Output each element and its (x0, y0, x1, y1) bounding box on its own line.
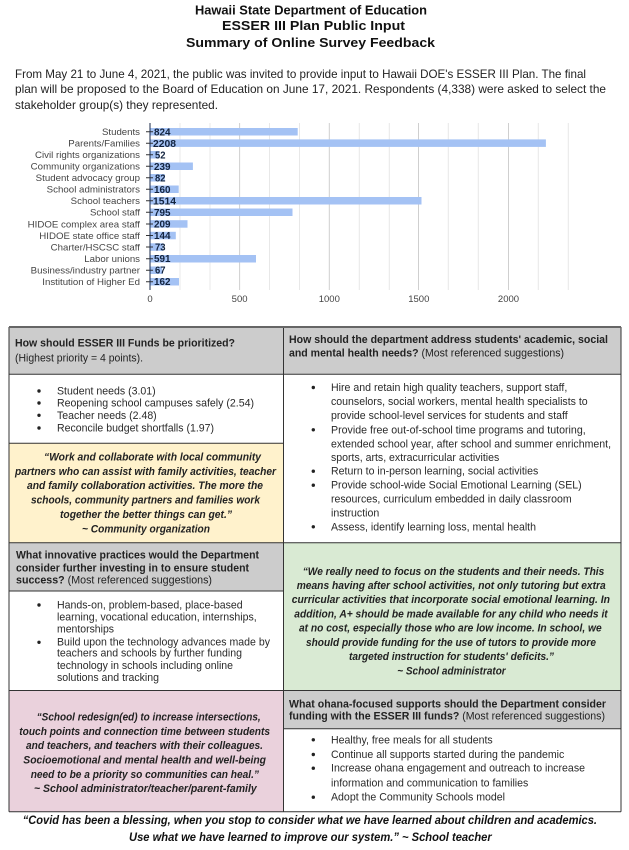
panel: community organization quote: partners who can assist with family activities, teacher (14, 466, 277, 478)
panel: community organization quote: schools, community partners and families work (31, 495, 261, 507)
x axis labels: 1000 (319, 294, 340, 305)
list: priority scores: Reopening school campuses safely (2.54) (57, 398, 254, 410)
panel: ohana supports header: What ohana-focused supports should the Department consider (289, 699, 607, 711)
category labels: Charter/HSCSC staff (51, 242, 140, 254)
panel: community organization quote: and family collaboration activities. The more the (27, 480, 263, 492)
category labels: School teachers (71, 196, 140, 207)
value labels: 52 (155, 150, 166, 161)
list: academic and mental health suggestions: resources, curriculum embedded in daily classroom (331, 494, 572, 506)
panel: school administrator quote: addition, A+ should be made available for any child who needs it (294, 608, 609, 620)
category labels: Civil rights organizations (35, 150, 140, 161)
category labels (28, 127, 140, 288)
bar chart: stakeholder groups (28, 123, 568, 305)
list: academic and mental health suggestions: Provide free out-of-school time programs and tutoring, (331, 424, 586, 436)
panel: community organization quote: “Work and collaborate with local community (44, 452, 262, 464)
panel: community organization quote (9, 443, 284, 543)
value labels: 239 (154, 162, 171, 173)
panel: prioritization header: (Highest priority = 4 points). (15, 353, 143, 365)
panel: school administrator/teacher/parent quote: and teachers, and teachers with their colleagues. (26, 740, 263, 752)
panel: academic needs header (284, 327, 621, 374)
list: ohana supports: Increase ohana engagement and outreach to increase (331, 763, 585, 775)
x axis labels: 500 (232, 294, 248, 305)
list: academic and mental health suggestions: Provide school-wide Social Emotional Learning (SEL) (331, 480, 582, 492)
list: innovative practices: Build upon the technology advances made by (57, 637, 270, 649)
closing quote: “Covid has been a blessing, when you stop to consider what we have learned about children and academics. (23, 815, 597, 827)
category labels: Parents/Families (68, 138, 140, 150)
category labels: Students (102, 127, 140, 138)
category labels: Business/industry partner (31, 266, 140, 276)
panel: school administrator/teacher/parent quote: touch points and connection time between students (19, 726, 270, 738)
value labels: 144 (154, 231, 171, 242)
x axis labels: 1500 (408, 294, 429, 305)
category labels: Labor unions (84, 254, 140, 265)
panel: school administrator quote: targeted instruction for students' deficits.” (349, 651, 554, 663)
panel: innovative practices header (9, 543, 284, 591)
list: innovative practices: learning, vocational education, internships, (57, 611, 257, 623)
title: Summary of Online Survey Feedback (186, 36, 435, 50)
list: ohana supports: Continue all supports started during the pandemic (331, 749, 565, 761)
title: Hawaii State Department of Education (195, 4, 427, 18)
bars (150, 128, 546, 286)
panel: school administrator quote: means having after school activities, not only tutoring but extra (297, 580, 606, 592)
list: innovative practices (37, 599, 270, 684)
list: academic and mental health suggestions: counselors, social workers, mental health specialists to (331, 396, 588, 408)
panel: school administrator quote: “We really need to focus on the students and their needs. This (303, 566, 604, 578)
x axis labels: 2000 (498, 294, 519, 305)
intro paragraph: From May 21 to June 4, 2021, the public was invited to provide input to Hawaii DOE's ESSER III Plan. The final (15, 67, 586, 81)
list: academic and mental health suggestions: Assess, identify learning loss, mental health (331, 521, 536, 533)
value labels: 160 (154, 185, 171, 196)
value labels: 82 (155, 173, 166, 184)
panel: innovative practices header: success? (Most referenced suggestions) (16, 575, 212, 587)
panel: academic needs header: How should the department address students' academic, social (289, 334, 608, 346)
list: priority scores: Student needs (3.01) (57, 386, 156, 398)
value labels: 1514 (153, 196, 176, 207)
list: innovative practices: mentorships (57, 624, 114, 636)
list: innovative practices: teachers and schools by further funding (57, 648, 242, 660)
panel: academic needs header: and mental health needs? (Most referenced suggestions) (289, 348, 564, 360)
panel: school administrator quote: curricular activities that incorporate social emotional learning. In (292, 594, 610, 606)
value labels: 162 (154, 277, 171, 288)
value labels: 2208 (153, 139, 176, 150)
panel: school administrator/teacher/parent quote: ~ School administrator/teacher/parent-family (34, 783, 258, 795)
category labels: Student advocacy group (36, 173, 140, 184)
category labels: Community organizations (31, 162, 140, 172)
panel: prioritization header (9, 327, 284, 374)
value labels: 591 (154, 254, 171, 265)
value labels (153, 127, 176, 288)
value labels: 824 (154, 127, 171, 138)
panel: innovative practices header: consider further investing in to ensure student (16, 563, 249, 575)
list: ohana supports (312, 734, 585, 804)
panel: ohana supports header (284, 690, 621, 729)
value labels: 67 (155, 266, 166, 277)
panel: prioritization header: How should ESSER III Funds be prioritized? (15, 338, 235, 350)
list: ohana supports: Healthy, free meals for all students (331, 734, 493, 746)
list: priority scores: Reconcile budget shortfalls (1.97) (57, 423, 214, 435)
closing quote (23, 815, 597, 844)
x axis labels: 0 (147, 294, 153, 305)
list: innovative practices: technology in schools including online (57, 660, 233, 672)
category labels: School administrators (47, 184, 140, 196)
value labels: 73 (155, 242, 166, 254)
panel: community organization quote: together the better things can get.” (60, 509, 232, 521)
list: academic and mental health suggestions: Return to in-person learning, social activities (331, 466, 539, 478)
category labels: School staff (90, 208, 140, 218)
title (186, 4, 435, 50)
list: academic and mental health suggestions: extended school year, after school and summer enrichment, (331, 438, 611, 450)
value labels: 795 (154, 208, 171, 219)
list: innovative practices: solutions and tracking (57, 672, 159, 684)
panel: school administrator/teacher/parent quote (9, 690, 284, 812)
category labels: Institution of Higher Ed (42, 277, 140, 288)
intro paragraph: stakeholder group(s) they represented. (15, 98, 218, 112)
panel: innovative practices header: What innovative practices would the Department (16, 550, 259, 562)
x axis labels (147, 294, 519, 305)
panel: school administrator/teacher/parent quote: need to be a priority so communities can heal.” (31, 769, 259, 781)
list: ohana supports: information and communication to families (331, 778, 529, 790)
panel: school administrator/teacher/parent quote: Socioemotional and mental health and well-being (23, 755, 266, 767)
list: academic and mental health suggestions: instruction (331, 508, 379, 520)
panel: ohana supports header: funding with the ESSER III funds? (Most referenced suggestions) (289, 711, 605, 723)
list: priority scores: Teacher needs (2.48) (57, 410, 157, 422)
intro paragraph: plan will be proposed to the Board of Education on June 17, 2021. Respondents (4,338) were asked to select the (15, 82, 606, 96)
list: academic and mental health suggestions: sports, arts, extracurricular activities (331, 452, 500, 464)
list: academic and mental health suggestions: Hire and retain high quality teachers, support staff, (331, 382, 567, 394)
panel: school administrator quote: should provide funding for the use of tutors to provide more (306, 637, 596, 649)
panel: school administrator quote (284, 543, 621, 690)
panel: school administrator quote: at no cost, especially those who are low income. In school, we (299, 623, 602, 635)
list: innovative practices: Hands-on, problem-based, place-based (57, 599, 243, 611)
category labels: HIDOE state office staff (39, 231, 140, 242)
list: ohana supports: Adopt the Community Schools model (331, 792, 505, 804)
list: priority scores (37, 386, 254, 435)
title: ESSER III Plan Public Input (222, 19, 406, 33)
list: academic and mental health suggestions (312, 382, 611, 533)
panel: school administrator/teacher/parent quote: “School redesign(ed) to increase intersections, (37, 712, 261, 724)
panel: school administrator quote: ~ School administrator (397, 665, 506, 677)
closing quote: Use what we have learned to improve our system.” ~ School teacher (129, 832, 492, 844)
intro paragraph (15, 67, 606, 112)
panel: community organization quote: ~ Community organization (82, 524, 210, 536)
list: academic and mental health suggestions: provide school-level services for students and staff (331, 410, 569, 422)
category labels: HIDOE complex area staff (28, 220, 140, 230)
value labels: 209 (154, 220, 171, 230)
